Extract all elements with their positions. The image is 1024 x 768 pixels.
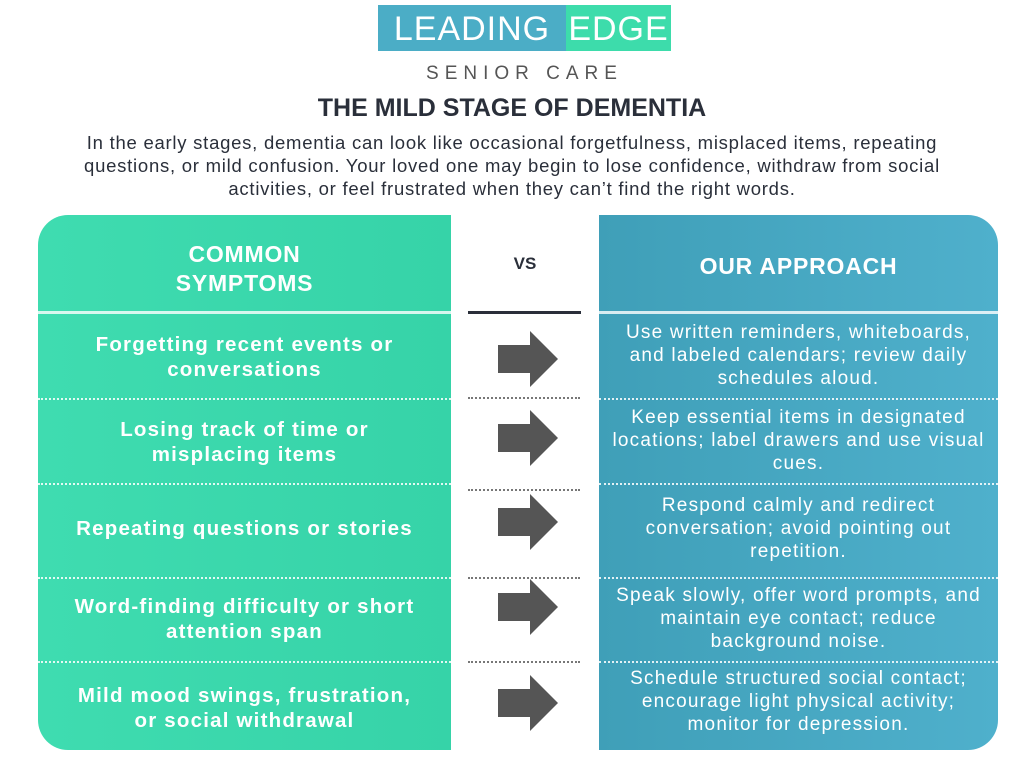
approach 1: and labeled calendars; review daily [630,344,967,366]
symptom 2 [120,418,369,466]
heading: our approach: OUR APPROACH [700,253,897,279]
approach 5: monitor for depression. [688,714,909,734]
approach 2: locations; label drawers and use visual [612,430,985,450]
approach 1: schedules aloud. [718,368,879,388]
symptom 1: conversations [167,358,322,380]
approach 2 [612,406,985,474]
intro text: questions, or mild confusion. Your loved one may begin to lose confidence, withdraw from social [84,155,940,176]
approach 5: Schedule structured social contact; [630,668,967,688]
intro text [84,132,940,199]
logo: leading [378,5,566,51]
arrow 4 [498,579,558,635]
approach 3: Respond calmly and redirect [662,494,935,516]
approach 4: maintain eye contact; reduce [660,608,937,628]
symptom 2: misplacing items [152,443,337,466]
symptom 5: Mild mood swings, frustration, [78,684,411,707]
approach 2: cues. [773,452,824,474]
symptom 4: attention span [166,620,323,643]
heading: common symptoms: COMMON [188,241,301,267]
title: THE MILD STAGE OF DEMENTIA [318,94,706,122]
heading: common symptoms [176,241,313,296]
intro text: In the early stages, dementia can look like occasional forgetfulness, misplaced items, repeating [87,132,937,153]
approach 3: conversation; avoid pointing out [646,518,951,538]
approach 1 [626,322,971,388]
approach 3: repetition. [750,540,847,562]
symptom 3: Repeating questions or stories [76,516,413,540]
symptom 1: Forgetting recent events or [96,332,393,356]
logo: senior care: SENIOR CARE [426,63,623,84]
symptom 4 [74,595,414,643]
approach 2: Keep essential items in designated [631,406,966,428]
symptom 5: or social withdrawal [135,709,354,732]
intro text: activities, or feel frustrated when they can’t find the right words. [228,178,796,199]
logo [378,5,671,84]
arrow 2 [498,410,558,466]
symptom 4: Word-finding difficulty or short [75,595,414,618]
approach 3 [646,494,951,562]
approach 4: background noise. [711,630,886,652]
approach 4: Speak slowly, offer word prompts, and [616,584,981,606]
approach 1: Use written reminders, whiteboards, [626,322,971,342]
heading: common symptoms: SYMPTOMS [176,270,313,296]
logo: leading: LEADING [394,10,550,48]
vs label: VS [514,254,536,273]
symptom 2: Losing track of time or [120,418,369,441]
panel: common symptoms [38,215,451,750]
logo: edge: EDGE [568,10,669,48]
approach 4 [616,584,981,652]
approach 5 [630,668,967,734]
symptom 5 [78,684,411,732]
arrow 1 [498,331,558,387]
arrow 3 [498,494,558,550]
arrow 5 [498,675,558,731]
symptom 1 [96,332,393,380]
panel: our approach [599,215,998,750]
approach 5: encourage light physical activity; [642,690,955,712]
